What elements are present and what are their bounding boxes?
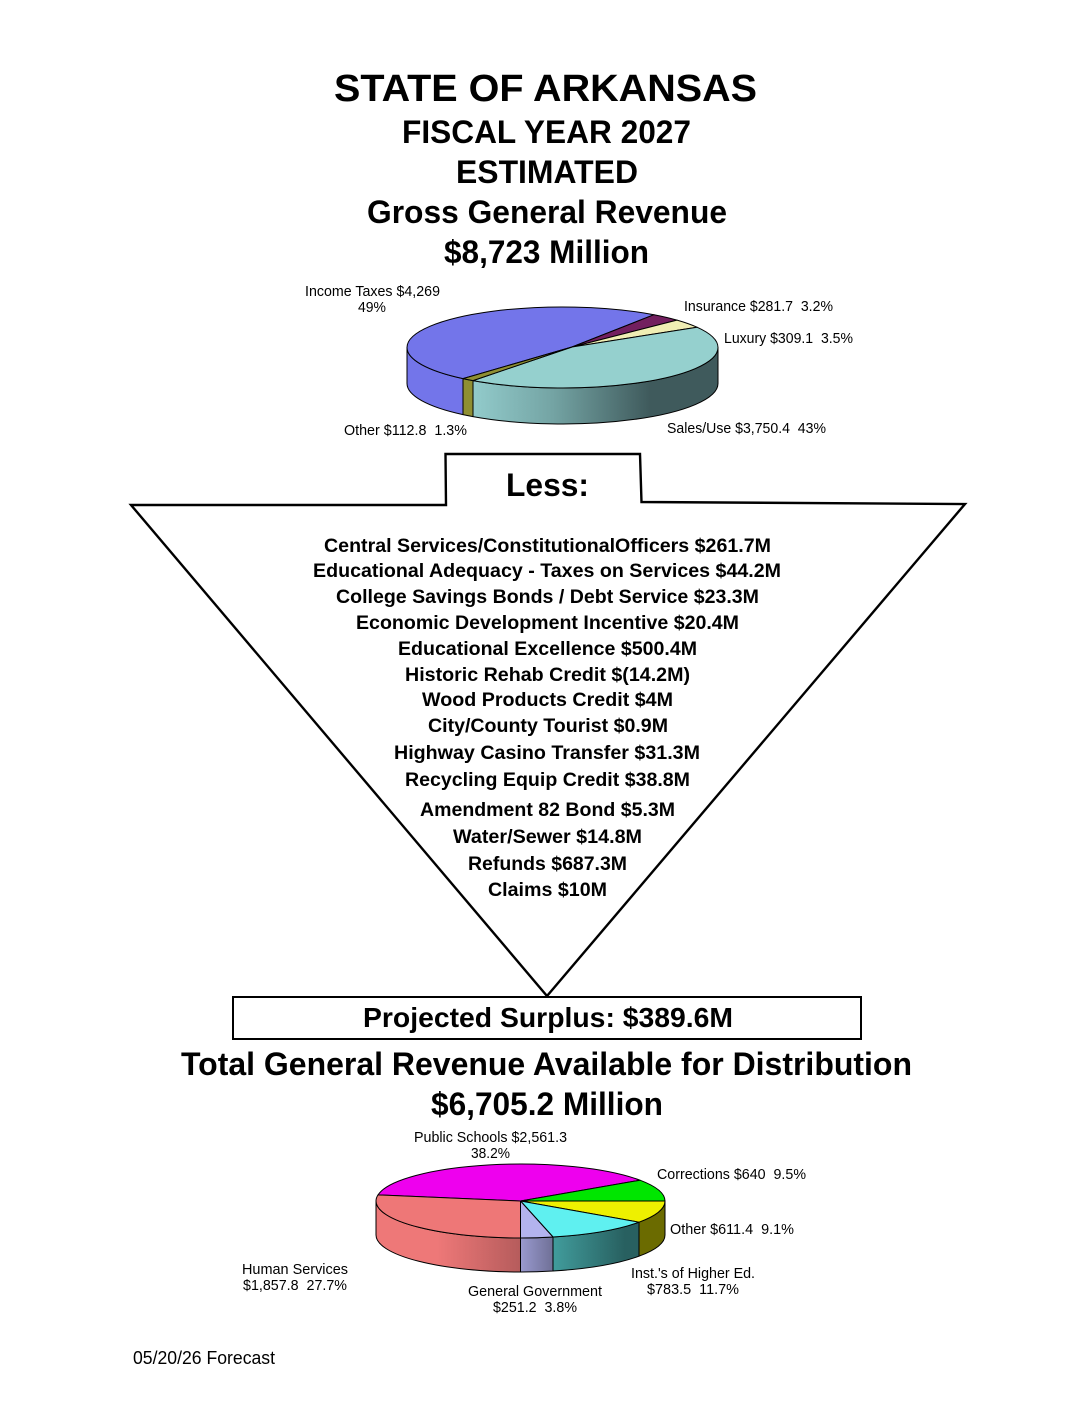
projected surplus box: Projected Surplus: $389.6M bbox=[363, 1002, 733, 1033]
pie labels: gross general revenue: Insurance $281.7 3.2% bbox=[684, 299, 833, 315]
slice: human services bbox=[376, 1195, 520, 1238]
deductions list: Economic Development Incentive $20.4M bbox=[356, 612, 739, 634]
pie labels: distribution: $1,857.8 27.7% bbox=[243, 1278, 347, 1294]
heading: total general revenue: $6,705.2 Million bbox=[431, 1086, 663, 1122]
slice: sales/use bbox=[473, 327, 718, 388]
pie labels: distribution: 38.2% bbox=[471, 1146, 510, 1162]
pie labels: gross general revenue bbox=[305, 284, 853, 439]
pie labels: distribution: Corrections $640 9.5% bbox=[657, 1167, 806, 1183]
slice: other bbox=[520, 1201, 665, 1222]
pie labels: gross general revenue: Income Taxes $4,269 bbox=[305, 284, 440, 300]
funnel arrow: deductions bbox=[131, 454, 965, 996]
heading: total general revenue bbox=[181, 1046, 912, 1122]
deductions list bbox=[313, 535, 781, 901]
pie chart: gross general revenue bbox=[407, 307, 718, 424]
pie labels: gross general revenue: Luxury $309.1 3.5% bbox=[724, 331, 853, 347]
deductions list: College Savings Bonds / Debt Service $23.3M bbox=[336, 586, 759, 608]
deductions list: Amendment 82 Bond $5.3M bbox=[420, 799, 675, 821]
slice: luxury bbox=[572, 320, 697, 347]
title: $8,723 Million bbox=[444, 234, 649, 270]
title: Gross General Revenue bbox=[367, 194, 727, 230]
slice: higher education bbox=[520, 1201, 639, 1237]
deductions list: Refunds $687.3M bbox=[468, 853, 627, 875]
deductions list: Water/Sewer $14.8M bbox=[453, 826, 642, 848]
slice: other bbox=[463, 347, 572, 381]
heading: less: Less: bbox=[506, 467, 589, 503]
side: sales/use bbox=[473, 348, 718, 424]
slice: insurance bbox=[572, 315, 677, 347]
pie chart: distribution bbox=[376, 1164, 665, 1272]
side: human services bbox=[376, 1201, 520, 1272]
side: other bbox=[639, 1201, 665, 1256]
deductions list: Central Services/ConstitutionalOfficers $261.7M bbox=[324, 535, 771, 557]
deductions list: Recycling Equip Credit $38.8M bbox=[405, 769, 690, 791]
pie labels: distribution: $783.5 11.7% bbox=[647, 1282, 739, 1298]
side: higher education bbox=[553, 1222, 639, 1271]
pie labels: distribution: Public Schools $2,561.3 bbox=[414, 1130, 567, 1146]
pie labels: gross general revenue: 49% bbox=[358, 300, 386, 316]
pie labels: distribution: Inst.'s of Higher Ed. bbox=[631, 1266, 755, 1282]
side: general government bbox=[520, 1237, 553, 1272]
deductions list: Educational Excellence $500.4M bbox=[398, 638, 697, 660]
pie labels: distribution: Human Services bbox=[242, 1262, 348, 1278]
deductions list: Wood Products Credit $4M bbox=[422, 689, 673, 711]
deductions list: City/County Tourist $0.9M bbox=[428, 715, 668, 737]
slice: income taxes bbox=[407, 307, 654, 379]
slice: public schools bbox=[378, 1164, 640, 1201]
pie labels: gross general revenue: Sales/Use $3,750.4 43% bbox=[667, 421, 826, 437]
pie labels: distribution: General Government bbox=[468, 1284, 602, 1300]
title bbox=[334, 68, 757, 270]
deductions list: Highway Casino Transfer $31.3M bbox=[394, 742, 700, 764]
side: other bbox=[463, 379, 473, 417]
slice: general government bbox=[520, 1201, 553, 1238]
deductions list: Claims $10M bbox=[488, 879, 607, 901]
pie labels: distribution: Other $611.4 9.1% bbox=[670, 1222, 794, 1238]
projected surplus box bbox=[233, 997, 861, 1039]
footnote: forecast date: 05/20/26 Forecast bbox=[133, 1348, 275, 1368]
pie labels: distribution: $251.2 3.8% bbox=[493, 1300, 577, 1316]
side: income taxes bbox=[407, 348, 463, 415]
deductions list: Educational Adequacy - Taxes on Services $44.2M bbox=[313, 560, 781, 582]
pie labels: gross general revenue: Other $112.8 1.3% bbox=[344, 423, 467, 439]
title: ESTIMATED bbox=[456, 154, 638, 190]
deductions list: Historic Rehab Credit $(14.2M) bbox=[405, 664, 690, 686]
slice: corrections bbox=[520, 1180, 665, 1201]
pie labels: distribution bbox=[242, 1130, 806, 1316]
title: STATE OF ARKANSAS bbox=[334, 68, 757, 110]
title: FISCAL YEAR 2027 bbox=[402, 114, 691, 150]
heading: total general revenue: Total General Revenue Available for Distribution bbox=[181, 1046, 912, 1082]
